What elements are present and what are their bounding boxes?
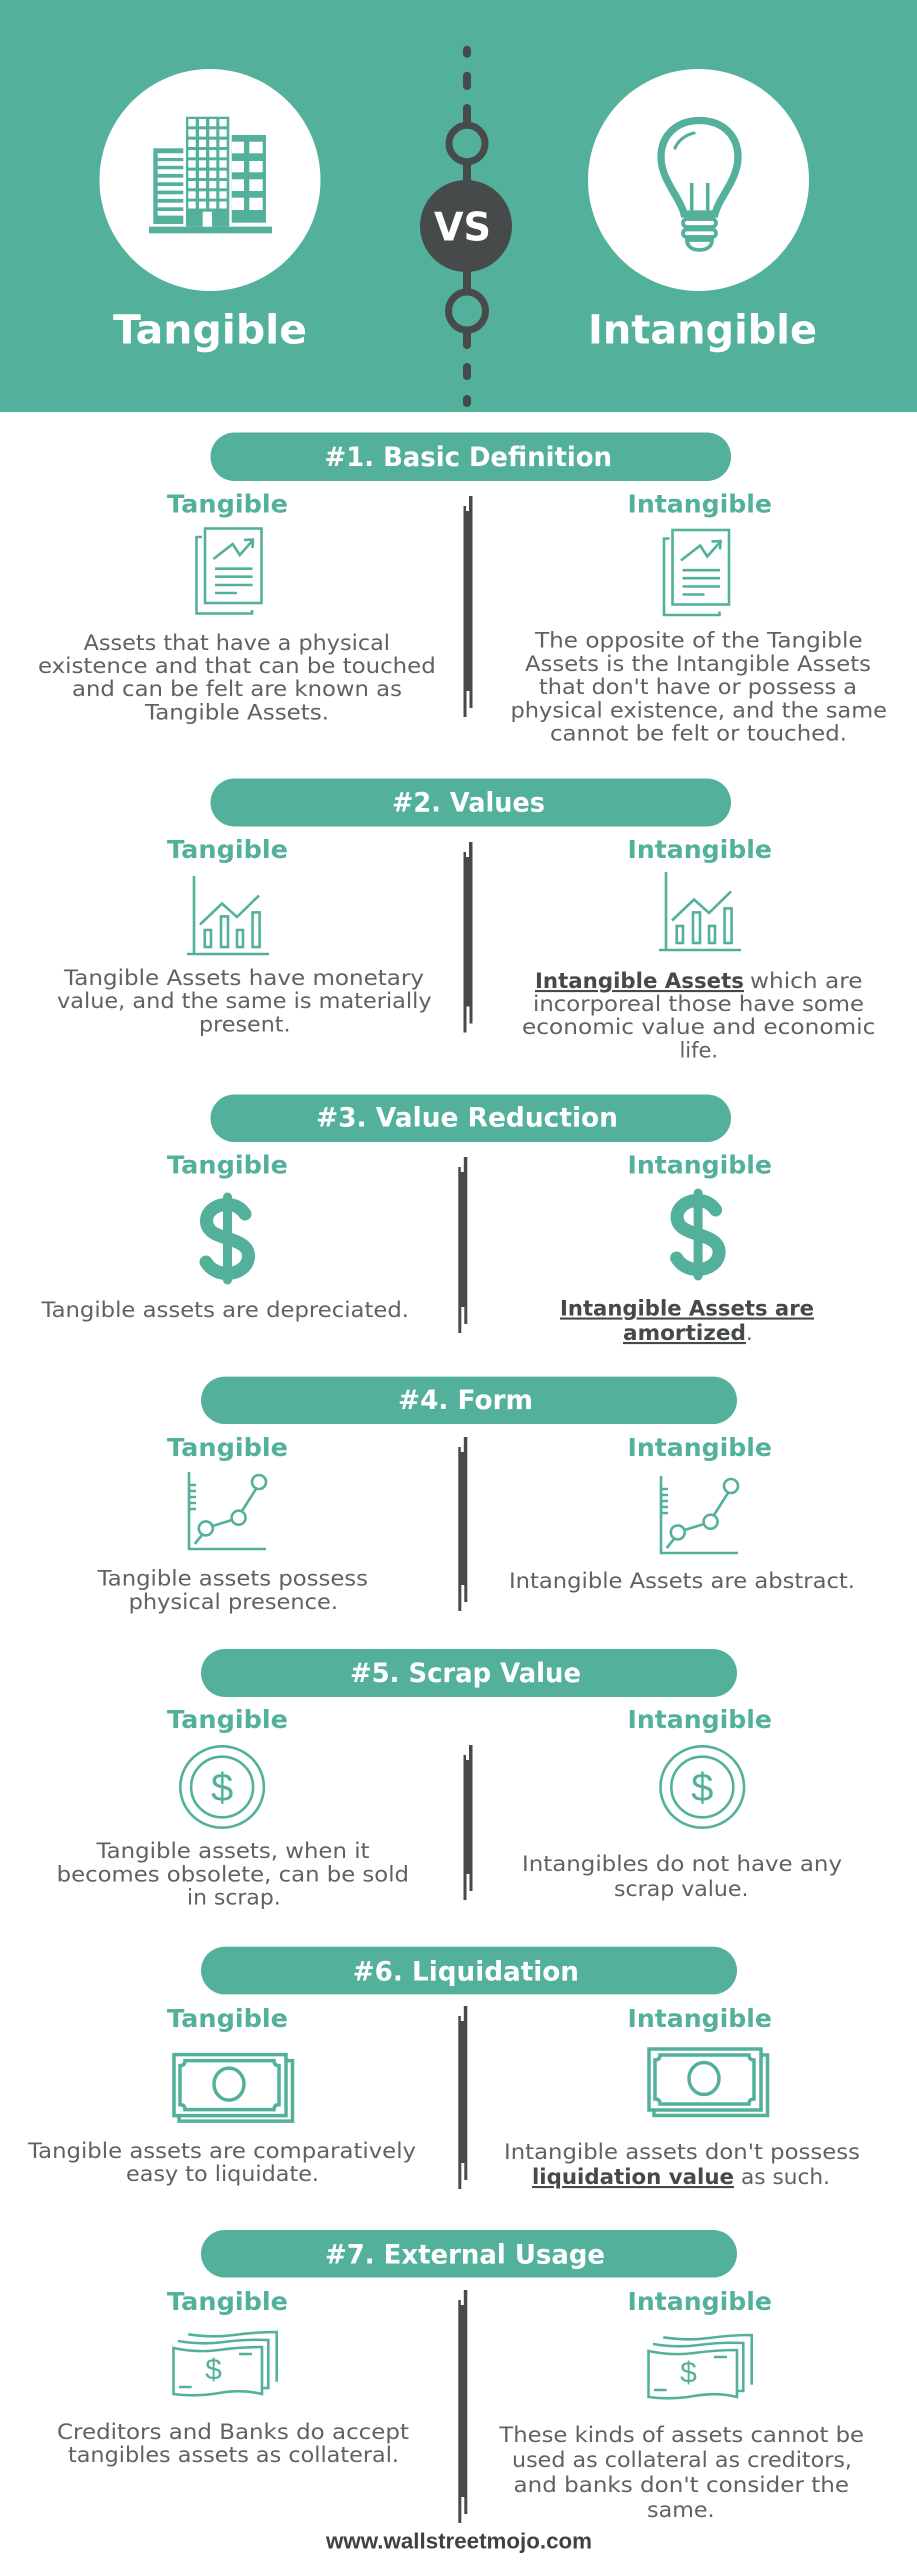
icon: dollar sign	[206, 1197, 248, 1280]
text: tangible liquidation	[27, 2139, 416, 2186]
text: tangible definition: Assets that have a physical	[84, 631, 390, 655]
section 5: Scrap Value	[57, 1649, 842, 1909]
column label: Tangible: Tangible	[167, 2004, 288, 2033]
text: tangible reduction: Tangible assets are depreciated.	[40, 1298, 409, 1322]
column label: Intangible: Intangible	[628, 1433, 772, 1462]
column label: Tangible: Tangible	[167, 490, 288, 518]
text: intangible usage: These kinds of assets cannot be	[498, 2423, 864, 2447]
text: intangible usage: and banks don't consider the	[514, 2473, 849, 2497]
icon: banknotes	[174, 2055, 292, 2121]
column label: Intangible: Intangible	[628, 2287, 772, 2316]
VS badge: VS	[434, 206, 491, 250]
text: tangible form: physical presence.	[129, 1590, 338, 1614]
text: intangible reduction: .	[746, 1321, 753, 1345]
icon: cash stack: $	[680, 2356, 697, 2390]
heading pill	[201, 1947, 737, 1994]
section 6: Liquidation	[27, 1947, 860, 2189]
text: tangible liquidation: Tangible assets are comparatively	[27, 2139, 416, 2163]
divider	[458, 2290, 467, 2523]
icon: line chart	[189, 1472, 266, 1549]
icon: coin: $	[211, 1766, 233, 1810]
text: intangible definition: The opposite of the Tangible	[534, 629, 863, 653]
text: intangible liquidation: as such.	[741, 2165, 830, 2189]
text: intangible definition: that don't have or possess a	[539, 675, 857, 699]
column label: Intangible: Intangible	[628, 490, 772, 518]
heading pill: #1. Basic Definition	[324, 442, 612, 473]
icon: bar chart	[187, 876, 269, 954]
text: intangible reduction	[560, 1296, 814, 1345]
text: intangible values: which are	[750, 969, 863, 993]
divider	[464, 842, 472, 1032]
column label: Intangible: Intangible	[628, 2004, 772, 2033]
text: tangible definition	[38, 631, 436, 724]
icon: cash stack	[648, 2335, 752, 2398]
text: tangible usage: Creditors and Banks do accept	[57, 2420, 409, 2444]
text: tangible scrap: Tangible assets, when it	[95, 1839, 369, 1863]
circle: intangible	[588, 69, 809, 291]
divider	[458, 2006, 467, 2189]
text: tangible definition: Tangible Assets.	[144, 700, 329, 724]
icon: report	[196, 528, 262, 614]
heading pill	[201, 1377, 737, 1424]
section 3: Value Reduction	[40, 1094, 814, 1345]
centre dashed line and rings	[448, 50, 486, 403]
icon: building	[149, 117, 272, 233]
column label: Tangible: Tangible	[167, 1433, 288, 1462]
text: tangible usage: tangibles assets as collateral.	[68, 2443, 399, 2467]
text: tangible values: value, and the same is materially	[57, 989, 432, 1013]
icon: coin	[660, 1746, 744, 1828]
text: tangible liquidation: easy to liquidate.	[126, 2162, 319, 2186]
heading pill: #5. Scrap Value	[350, 1658, 581, 1689]
heading pill	[201, 2230, 737, 2278]
title: Tangible: Tangible	[113, 305, 307, 353]
section 2: Values	[57, 778, 875, 1062]
VS badge	[420, 180, 512, 272]
section 1: Basic Definition	[38, 432, 887, 746]
divider	[464, 496, 472, 717]
column label: Tangible: Tangible	[167, 1705, 288, 1734]
text: intangible usage: used as collateral as creditors,	[512, 2448, 852, 2472]
column label: Tangible: Tangible	[167, 1150, 288, 1180]
text: tangible usage	[57, 2420, 409, 2467]
text: intangible usage: same.	[647, 2498, 715, 2522]
text: tangible values	[57, 966, 432, 1037]
text: intangible values: Intangible Assets	[535, 969, 744, 993]
divider	[464, 1745, 472, 1900]
text: intangible definition: physical existence, and the same	[510, 698, 887, 722]
heading pill	[210, 432, 731, 481]
icon: line chart	[661, 1476, 738, 1553]
text: intangible definition	[510, 629, 887, 746]
text: tangible definition: existence and that can be touched	[38, 654, 436, 678]
text: intangible liquidation: liquidation value	[532, 2165, 734, 2189]
section 4: Form	[97, 1377, 855, 1614]
heading pill: #3. Value Reduction	[316, 1103, 618, 1134]
text: tangible scrap: becomes obsolete, can be sold	[57, 1862, 409, 1886]
divider	[458, 1437, 467, 1611]
heading pill: #7. External Usage	[325, 2240, 605, 2271]
heading pill	[201, 1649, 737, 1697]
header banner	[0, 0, 917, 412]
text: intangible scrap: scrap value.	[614, 1877, 748, 1901]
icon: banknotes	[649, 2049, 768, 2116]
column label: Tangible: Tangible	[167, 2287, 288, 2316]
text: tangible values: Tangible Assets have monetary	[63, 966, 424, 990]
text: intangible definition: Assets is the Intangible Assets	[525, 652, 871, 676]
text: tangible definition: and can be felt are known as	[72, 677, 402, 701]
section 7: External Usage	[57, 2230, 864, 2523]
text: tangible scrap: in scrap.	[187, 1885, 281, 1909]
heading pill: #2. Values	[392, 788, 545, 818]
icon: coin	[180, 1746, 264, 1828]
column label: Tangible: Tangible	[167, 835, 288, 864]
column label: Intangible: Intangible	[628, 1150, 772, 1180]
heading pill	[210, 1094, 731, 1142]
column label: Intangible: Intangible	[628, 835, 772, 864]
text: intangible values: incorporeal those have some	[533, 992, 864, 1016]
text: intangible scrap: Intangibles do not have any	[522, 1852, 842, 1876]
text: intangible values: economic value and economic	[522, 1015, 875, 1039]
text: intangible form: Intangible Assets are abstract.	[509, 1569, 855, 1593]
heading pill	[210, 778, 731, 826]
text: tangible form: Tangible assets possess	[97, 1566, 368, 1590]
icon: bar chart	[659, 872, 741, 950]
icon: light bulb	[661, 120, 738, 250]
icon: dollar sign	[677, 1193, 719, 1276]
icon: report	[664, 530, 729, 615]
text: intangible usage	[498, 2423, 864, 2522]
column label: Intangible: Intangible	[628, 1705, 772, 1734]
icon: cash stack	[174, 2332, 277, 2395]
text: intangible values	[522, 969, 875, 1062]
heading pill: #6. Liquidation	[353, 1956, 579, 1988]
divider	[458, 1157, 467, 1333]
text: intangible definition: cannot be felt or touched.	[550, 722, 847, 746]
text: intangible reduction: amortized	[623, 1321, 746, 1345]
text: intangible liquidation: Intangible assets don't possess	[504, 2140, 860, 2164]
circle: tangible	[100, 69, 320, 291]
icon: cash stack: $	[205, 2354, 222, 2386]
text: intangible liquidation	[504, 2140, 860, 2189]
icon: coin: $	[691, 1766, 713, 1810]
text: intangible reduction: Intangible Assets are	[560, 1296, 814, 1320]
heading pill: #4. Form	[398, 1385, 533, 1416]
text: tangible scrap	[57, 1839, 409, 1909]
title: Intangible: Intangible	[588, 305, 817, 353]
text: tangible values: present.	[199, 1013, 291, 1037]
text: intangible scrap	[522, 1852, 842, 1901]
text: intangible values: life.	[680, 1038, 718, 1062]
footer: website: www.wallstreetmojo.com	[325, 2529, 592, 2554]
text: tangible form	[97, 1566, 368, 1614]
